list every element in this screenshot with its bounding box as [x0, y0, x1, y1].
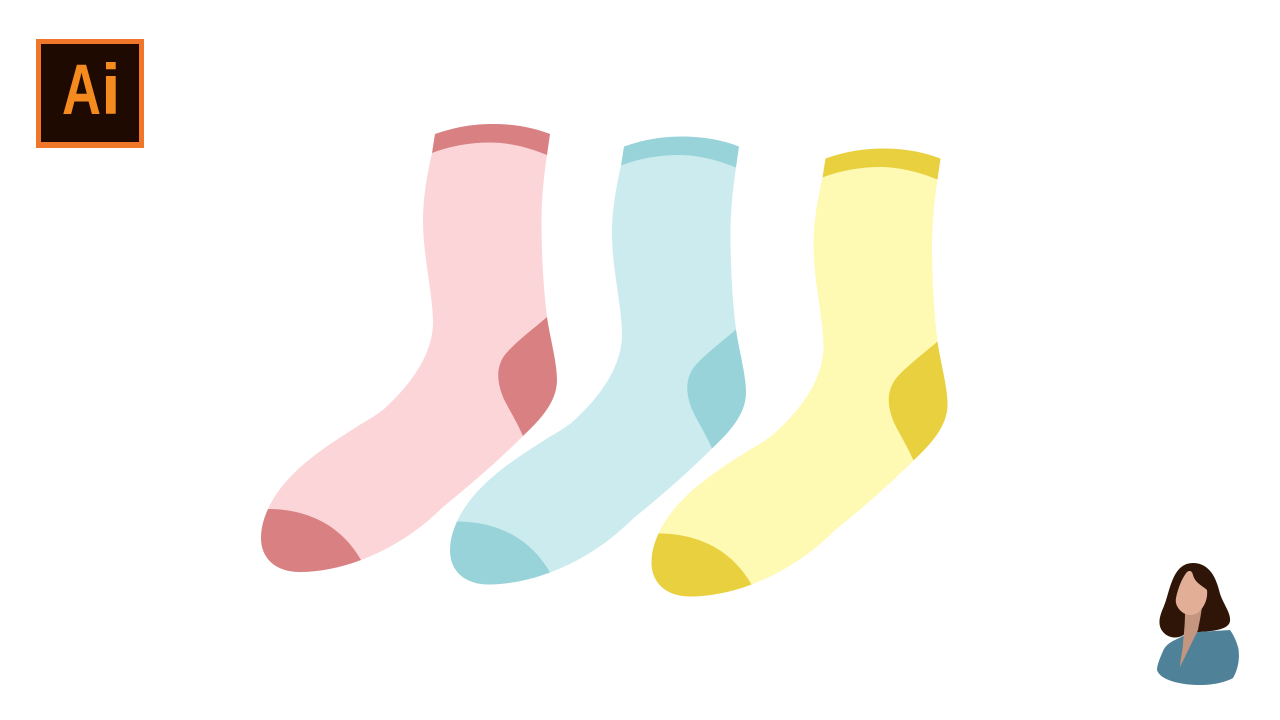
icon: Adobe Illustrator logo [36, 39, 144, 148]
avatar neck [1180, 606, 1202, 667]
blue sock toe [450, 522, 550, 584]
icon: Adobe Illustrator logo: A [62, 51, 101, 130]
pink sock toe [261, 509, 361, 572]
icon: Adobe Illustrator logo: i [101, 51, 121, 130]
yellow sock cuff [822, 148, 940, 180]
blue sock cuff [621, 136, 739, 168]
yellow sock heel [889, 342, 948, 460]
illustration: yellow sock [652, 148, 948, 596]
blue sock heel [687, 330, 746, 448]
pink sock heel [498, 317, 557, 436]
avatar body [1157, 630, 1239, 685]
icon: woman avatar [1157, 563, 1239, 685]
illustration: pink sock [261, 124, 557, 572]
avatar face [1176, 571, 1207, 615]
pink sock cuff [432, 124, 550, 155]
illustration: blue sock [450, 136, 746, 584]
yellow sock toe [652, 534, 752, 596]
avatar hair [1159, 563, 1230, 638]
